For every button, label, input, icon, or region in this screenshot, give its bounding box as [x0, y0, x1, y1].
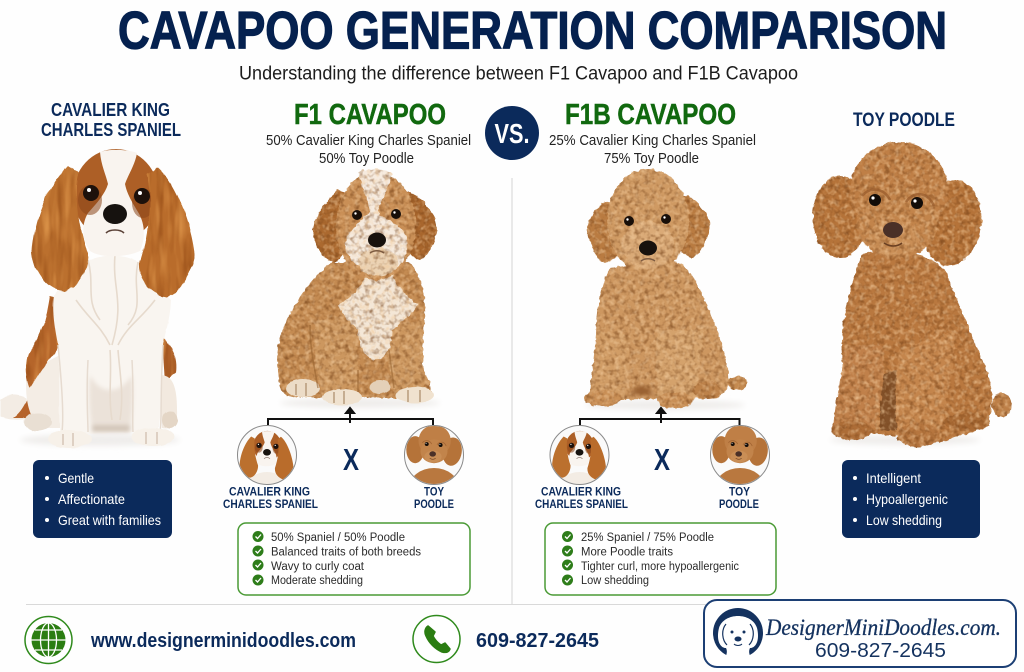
parent labels: CHARLES SPANIEL	[223, 499, 318, 511]
panel: Cavalier traits: Gentle	[58, 470, 94, 486]
parent thumbnail: Toy Poodle	[404, 425, 464, 485]
phone number: 609-827-2645	[476, 630, 599, 652]
logo badge	[704, 600, 1016, 667]
website: www.designerminidoodles.com	[90, 630, 356, 652]
heading: F1 Cavapoo: 50% Cavalier King Charles Spaniel	[266, 133, 471, 149]
parent tree: F1	[223, 408, 466, 511]
panel: F1 traits checklist: 50% Spaniel / 50% Poodle	[271, 532, 405, 544]
VS badge	[485, 106, 539, 160]
heading: F1 Cavapoo	[266, 99, 471, 167]
panel: F1 traits checklist: Balanced traits of both breeds	[271, 546, 421, 558]
parent labels: CAVALIER KING	[229, 486, 310, 498]
photo: F1 Cavapoo puppy	[277, 169, 440, 408]
parent labels: CHARLES SPANIEL	[535, 499, 628, 511]
panel: F1 traits checklist: Wavy to curly coat	[271, 561, 365, 573]
photo: Cavalier King Charles Spaniel	[0, 149, 195, 448]
parent thumbnail: Cavalier	[550, 425, 610, 485]
icon: phone	[413, 616, 460, 662]
panel: F1B traits checklist	[545, 523, 776, 595]
panel: F1 traits checklist	[238, 523, 470, 595]
panel: F1B traits checklist: Low shedding	[581, 575, 649, 587]
parent labels: TOY	[729, 486, 750, 498]
panel: Toy Poodle traits: Hypoallergenic	[866, 491, 948, 507]
heading: F1B Cavapoo: 75% Toy Poodle	[604, 151, 699, 167]
panel: F1B traits checklist: 25% Spaniel / 75% Poodle	[581, 532, 714, 544]
panel: Cavalier traits: Affectionate	[58, 491, 125, 507]
panel: Cavalier traits: Great with families	[58, 512, 161, 528]
photo: F1B Cavapoo puppy	[584, 169, 747, 410]
parent tree: F1B	[535, 408, 772, 511]
panel: Cavalier traits	[33, 460, 172, 538]
heading: F1B Cavapoo	[549, 99, 756, 167]
panel: F1B traits checklist: More Poodle traits	[581, 546, 673, 558]
heading: F1 Cavapoo: F1 CAVAPOO	[294, 99, 446, 131]
icon: globe	[25, 616, 72, 664]
parent thumbnail: Cavalier	[237, 425, 297, 485]
cross symbol: X	[654, 442, 670, 477]
parent thumbnail: Toy Poodle	[710, 425, 770, 485]
heading: Cavalier King Charles Spaniel: CHARLES SPANIEL	[41, 120, 181, 140]
logo phone number: 609-827-2645	[815, 640, 946, 662]
panel: Toy Poodle traits: Intelligent	[866, 470, 921, 486]
parent labels: TOY	[424, 486, 444, 498]
panel: Toy Poodle traits	[842, 460, 980, 538]
parent labels	[223, 486, 454, 511]
arrow: F1 parents to puppy	[346, 408, 354, 423]
photo: Toy Poodle	[813, 142, 1012, 447]
parent labels: POODLE	[719, 499, 759, 511]
logo dog icon	[713, 608, 763, 658]
heading: Toy Poodle: TOY POODLE	[853, 110, 955, 131]
panel: F1B traits checklist: Tighter curl, more hypoallergenic	[581, 561, 739, 573]
heading: Cavalier King Charles Spaniel: CAVALIER KING	[51, 100, 170, 120]
panel: F1 traits checklist: Moderate shedding	[271, 575, 363, 587]
panel: Toy Poodle traits: Low shedding	[866, 512, 942, 528]
heading: F1B Cavapoo: F1B CAVAPOO	[565, 99, 736, 131]
arrow: F1B parents to puppy	[657, 408, 665, 423]
logo wordmark: DesignerMiniDoodles.com.	[765, 615, 1001, 640]
subtitle: Understanding the difference between F1 Cavapoo and F1B Cavapoo	[239, 64, 798, 84]
cross symbol: X	[343, 442, 359, 477]
VS badge: VS.	[494, 118, 530, 149]
parent labels: CAVALIER KING	[541, 486, 621, 498]
heading: F1 Cavapoo: 50% Toy Poodle	[319, 151, 414, 167]
parent labels: POODLE	[414, 499, 454, 511]
heading: Cavalier King Charles Spaniel	[41, 100, 181, 140]
heading: F1B Cavapoo: 25% Cavalier King Charles Spaniel	[549, 133, 756, 149]
parent labels	[535, 486, 759, 511]
